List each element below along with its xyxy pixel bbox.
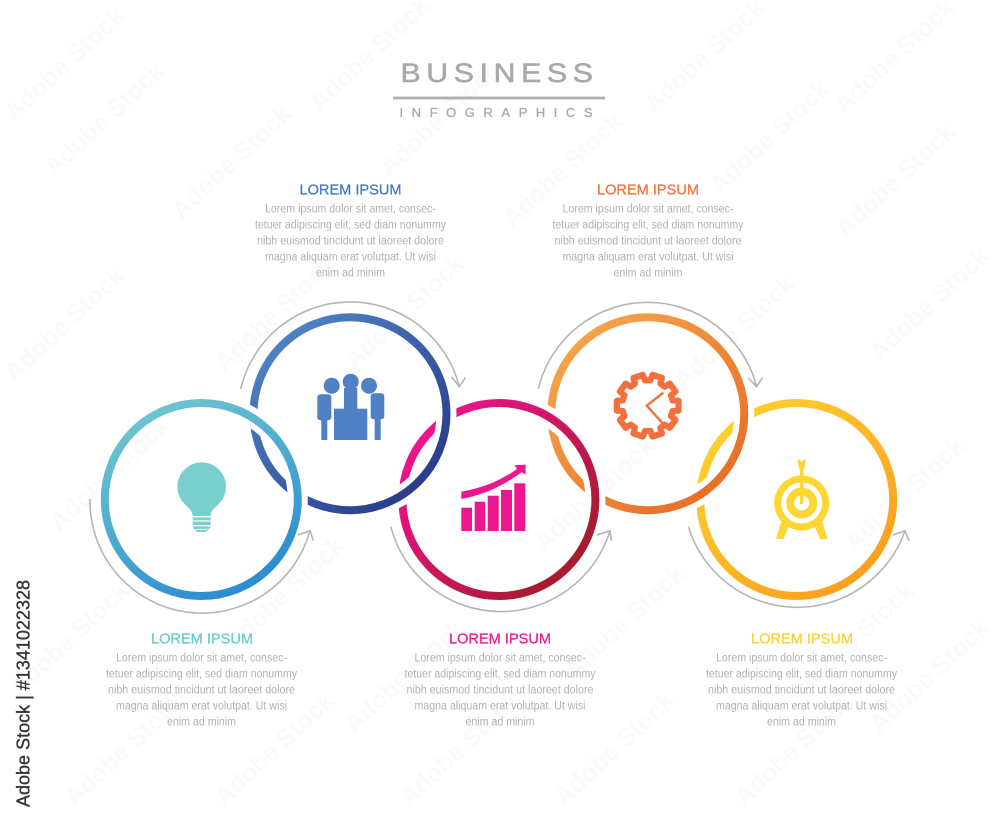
body: magenta xyxy=(404,652,596,728)
watermark pattern: Adobe Stock xyxy=(39,57,170,181)
icon: light bulb xyxy=(177,462,226,532)
arrow: around ring 5 xyxy=(688,527,909,607)
watermark pattern: Adobe Stock xyxy=(166,100,297,224)
body: blue: enim ad minim xyxy=(316,268,385,280)
watermark pattern: Adobe Stock xyxy=(394,687,525,811)
body: yellow: nibh euismod tincidunt ut laoreet dolore xyxy=(708,684,895,696)
text block: orange xyxy=(552,182,744,280)
subtitle: INFOGRAPHICS: INFOGRAPHICS xyxy=(400,105,593,120)
body: teal: nibh euismod tincidunt ut laoreet dolore xyxy=(108,684,295,696)
text block: yellow xyxy=(706,630,897,728)
body: yellow: Lorem ipsum dolor sit amet, consec- xyxy=(716,652,887,664)
watermark pattern: Adobe Stock xyxy=(704,75,835,199)
ring 2: blue xyxy=(254,317,446,510)
body: yellow: tetuer adipiscing elit, sed diam nonummy xyxy=(706,668,897,680)
watermark pattern: Adobe Stock xyxy=(374,57,505,181)
body: blue: nibh euismod tincidunt ut laoreet dolore xyxy=(257,236,444,248)
watermark pattern: Adobe Stock xyxy=(209,687,340,811)
body: magenta: nibh euismod tincidunt ut laoreet dolore xyxy=(406,684,594,696)
arrow: around ring 2 xyxy=(241,302,466,389)
watermark pattern: Adobe Stock xyxy=(339,614,470,738)
body: orange: magna aliquam erat volutpat. Ut wisi xyxy=(562,252,734,264)
heading: blue: LOREM IPSUM xyxy=(300,182,402,198)
body: orange: Lorem ipsum dolor sit amet, consec- xyxy=(562,204,734,216)
body: magenta: enim ad minim xyxy=(466,716,534,728)
watermark pattern: Adobe Stock xyxy=(789,577,920,701)
watermark pattern: Adobe Stock xyxy=(497,108,628,232)
body: magenta: Lorem ipsum dolor sit amet, consec- xyxy=(414,652,586,664)
watermark pattern: Adobe Stock xyxy=(839,432,970,556)
body: yellow: magna aliquam erat volutpat. Ut wisi xyxy=(716,700,887,712)
ring 3: magenta xyxy=(402,403,595,596)
body: orange: nibh euismod tincidunt ut laoreet dolore xyxy=(554,236,742,248)
watermark pattern: Adobe Stock xyxy=(549,687,680,811)
watermark pattern: Adobe Stock xyxy=(209,252,340,376)
watermark pattern: Adobe Stock xyxy=(830,118,961,242)
title rule xyxy=(393,97,605,99)
arrow: around ring 3 xyxy=(391,527,612,612)
heading: teal: LOREM IPSUM xyxy=(151,630,253,648)
watermark pattern: Adobe Stock xyxy=(0,2,130,126)
body: yellow xyxy=(706,652,897,728)
watermark pattern: Adobe Stock xyxy=(529,432,660,556)
body: orange xyxy=(552,204,744,280)
body: teal xyxy=(106,652,297,728)
title block xyxy=(393,58,605,120)
text block: blue xyxy=(255,182,446,280)
watermark pattern: Adobe Stock xyxy=(669,270,800,394)
body: yellow: enim ad minim xyxy=(767,716,836,728)
watermark pattern: Adobe Stock xyxy=(44,412,175,536)
body: blue: Lorem ipsum dolor sit amet, consec- xyxy=(265,204,436,216)
icon: target with arrow xyxy=(774,458,829,539)
watermark pattern: Adobe Stock xyxy=(729,687,860,811)
heading: orange: LOREM IPSUM xyxy=(597,182,699,198)
body: blue: tetuer adipiscing elit, sed diam nonummy xyxy=(255,220,446,232)
body: blue: magna aliquam erat volutpat. Ut wisi xyxy=(265,252,436,264)
arrow: around ring 4 xyxy=(538,302,762,389)
watermark pattern: Adobe Stock xyxy=(339,250,470,374)
text block: teal xyxy=(106,630,297,728)
icon: gear clock xyxy=(617,375,679,437)
title: BUSINESS: BUSINESS xyxy=(400,58,598,88)
body: magenta: tetuer adipiscing elit, sed diam nonummy xyxy=(404,668,596,680)
body: orange: enim ad minim xyxy=(614,268,682,280)
watermark pattern: Adobe Stock xyxy=(559,560,690,684)
watermark pattern: Adobe Stock xyxy=(864,614,995,738)
heading: magenta: LOREM IPSUM xyxy=(449,630,551,648)
watermark pattern: Adobe Stock xyxy=(864,242,995,366)
icon: team of people xyxy=(317,374,384,440)
body: blue xyxy=(255,204,446,280)
body: teal: enim ad minim xyxy=(167,716,236,728)
ring 5: yellow xyxy=(700,403,893,596)
stock id side label: Adobe Stock | #1341022328 xyxy=(14,580,34,807)
body: teal: magna aliquam erat volutpat. Ut wisi xyxy=(116,700,287,712)
watermark pattern: Adobe Stock xyxy=(0,262,130,386)
arrow: around ring 1 xyxy=(90,499,314,613)
watermark pattern: Adobe Stock xyxy=(219,532,350,656)
heading: yellow: LOREM IPSUM xyxy=(751,630,853,648)
body: orange: tetuer adipiscing elit, sed diam nonummy xyxy=(552,220,744,232)
icon: growth bar chart xyxy=(461,465,526,531)
body: teal: Lorem ipsum dolor sit amet, consec- xyxy=(116,652,287,664)
text block: magenta xyxy=(404,630,596,728)
body: magenta: magna aliquam erat volutpat. Ut wisi xyxy=(414,700,586,712)
ring 1: teal xyxy=(105,403,298,596)
ring 4: orange xyxy=(551,317,744,510)
watermark pattern: Adobe Stock xyxy=(59,687,190,811)
watermark pattern: Adobe Stock xyxy=(4,577,135,701)
body: teal: tetuer adipiscing elit, sed diam nonummy xyxy=(106,668,297,680)
